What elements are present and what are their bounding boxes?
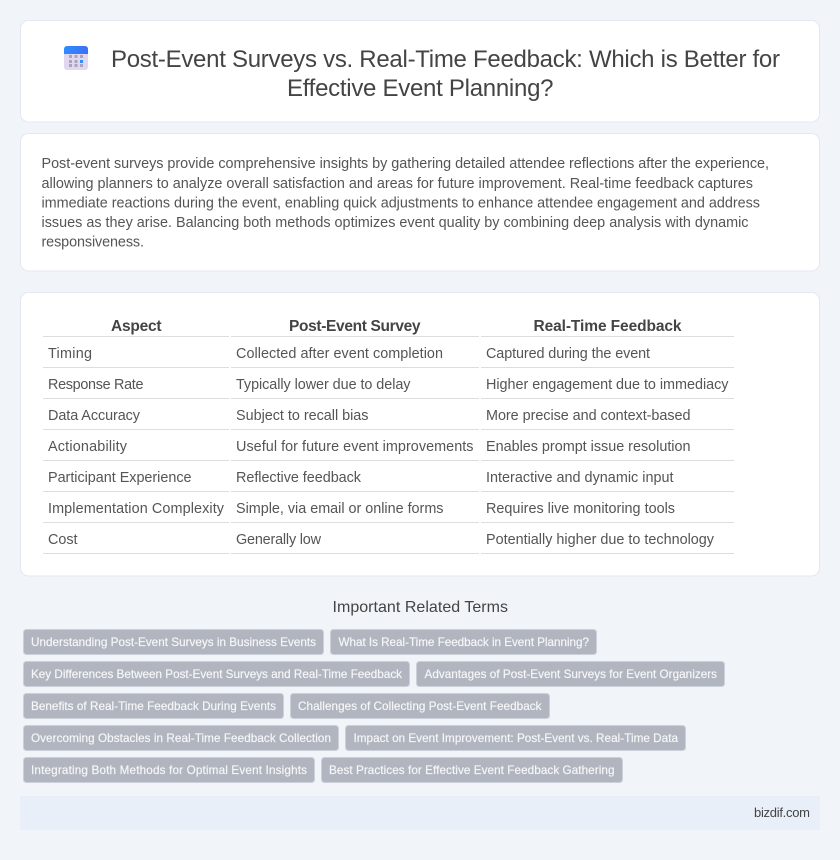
table row: cost: Cost	[48, 532, 78, 548]
tag: challenges of collecting feedback: Challenges of Collecting Post-Event Feedback	[298, 700, 542, 713]
icon: calendar	[64, 46, 88, 70]
title: Post-Event Surveys vs. Real-Time Feedback: Which is Better for	[111, 46, 780, 73]
table row: timing: Collected after event completion	[236, 346, 443, 362]
tag: integrating both methods: Integrating Both Methods for Optimal Event Insights	[31, 764, 307, 777]
tag: what is real-time feedback	[330, 630, 596, 654]
table row: actionability: Enables prompt issue resolution	[486, 439, 690, 455]
tag: advantages of post-event surveys: Advantages of Post-Event Surveys for Event Organizers	[424, 668, 717, 681]
table row: data accuracy: More precise and context-based	[486, 408, 690, 424]
table row: timing	[43, 346, 734, 368]
footer bar	[20, 796, 820, 830]
table row: data accuracy: Data Accuracy	[48, 408, 141, 424]
tag: overcoming obstacles	[24, 726, 338, 750]
table row: participant experience: Reflective feedback	[236, 470, 362, 486]
table row: participant experience	[43, 470, 734, 492]
panel: header	[20, 20, 820, 122]
table row: cost	[43, 532, 734, 554]
table row: cost: Potentially higher due to technology	[486, 532, 715, 548]
table row: timing: Timing	[48, 346, 92, 362]
heading: important related terms: Important Related Terms	[332, 599, 508, 616]
table row: actionability: Actionability	[48, 439, 128, 455]
table header row: Post-Event Survey	[289, 318, 421, 335]
table header row: Aspect	[111, 318, 162, 335]
tag: key differences	[24, 662, 410, 686]
panel: introduction	[20, 134, 820, 271]
title	[111, 46, 780, 102]
text block: summary paragraph	[42, 156, 769, 250]
table header row	[43, 318, 734, 337]
table row: data accuracy: Subject to recall bias	[236, 408, 368, 424]
tag: integrating both methods	[24, 758, 314, 782]
text block: summary paragraph: issues as they arise. Balancing both methods optimizes event quality by combining deep analysis with dynamic	[42, 215, 748, 231]
table header row: Real-Time Feedback	[534, 318, 682, 335]
tag: impact on event improvement	[346, 726, 686, 750]
table row: timing: Captured during the event	[486, 346, 650, 362]
table row: implementation complexity	[43, 501, 734, 523]
table row: implementation complexity: Requires live monitoring tools	[486, 501, 675, 517]
table row: response rate: Typically lower due to delay	[236, 377, 411, 393]
text block: summary paragraph: immediate reactions during the event, enabling quick adjustments to enhance attendee engagement and address	[42, 196, 760, 212]
table row: actionability	[43, 439, 734, 461]
text block: summary paragraph: Post-event surveys provide comprehensive insights by gathering detailed attendee reflections after the experience,	[42, 156, 769, 172]
table row: data accuracy	[43, 408, 734, 430]
table row: response rate	[43, 377, 734, 399]
table row: participant experience: Participant Experience	[48, 470, 192, 486]
tag: benefits of real-time feedback: Benefits of Real-Time Feedback During Events	[31, 700, 276, 713]
tag: best practices	[322, 758, 622, 782]
panel: comparison table	[20, 292, 820, 576]
tag: understanding post-event surveys	[24, 630, 324, 654]
table row: response rate: Higher engagement due to immediacy	[486, 377, 729, 393]
table row: actionability: Useful for future event improvements	[236, 439, 474, 455]
title: Effective Event Planning?	[287, 75, 554, 102]
tag: benefits of real-time feedback	[24, 694, 284, 718]
footer source text: bizdif.com	[754, 805, 810, 820]
table row: cost: Generally low	[236, 532, 322, 548]
tag: impact on event improvement: Impact on Event Improvement: Post-Event vs. Real-Time Data	[354, 732, 678, 745]
tag: advantages of post-event surveys	[416, 662, 724, 686]
text block: summary paragraph: allowing planners to analyze overall satisfaction and areas for future improvement. Real-time feedback captures	[42, 176, 753, 192]
text block: summary paragraph: responsiveness.	[42, 234, 144, 250]
tag: what is real-time feedback: What Is Real-Time Feedback in Event Planning?	[338, 636, 589, 649]
table row: implementation complexity: Implementation Complexity	[48, 501, 225, 517]
tag: challenges of collecting feedback	[290, 694, 550, 718]
tag: best practices: Best Practices for Effective Event Feedback Gathering	[329, 764, 614, 777]
table row: response rate: Response Rate	[48, 377, 144, 393]
panel: related term tags	[24, 630, 724, 782]
tag: overcoming obstacles: Overcoming Obstacles in Real-Time Feedback Collection	[31, 732, 331, 745]
tag: key differences: Key Differences Between Post-Event Surveys and Real-Time Feedback	[31, 668, 402, 681]
tag: understanding post-event surveys: Understanding Post-Event Surveys in Business Events	[31, 636, 316, 649]
table row: implementation complexity: Simple, via email or online forms	[236, 501, 444, 517]
table row: participant experience: Interactive and dynamic input	[486, 470, 674, 486]
